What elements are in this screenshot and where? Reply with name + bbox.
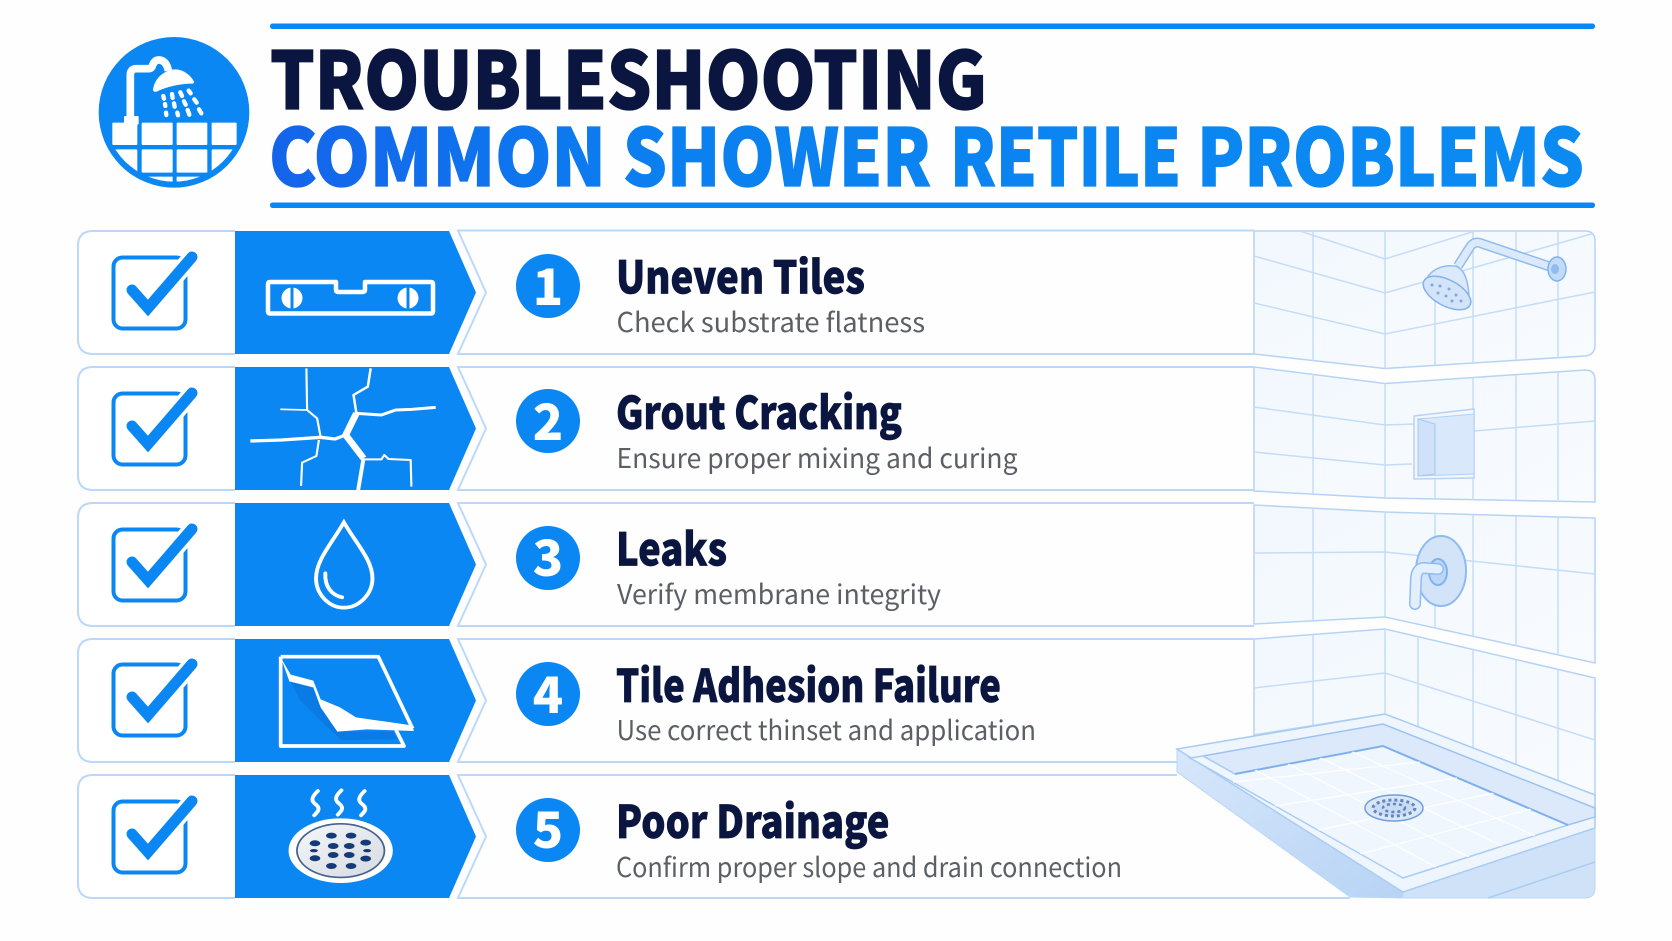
arrow panel: [235, 775, 476, 898]
status checkbox: [114, 800, 193, 872]
icon: shower over tiles: [99, 37, 249, 190]
wall band 3 with valve: [1254, 500, 1595, 665]
title line 2: SHOWER: [623, 94, 931, 209]
icon: shower valve: [1415, 536, 1466, 606]
title line 2: COMMON: [269, 94, 606, 209]
number badge: [516, 519, 580, 591]
icon: water drop: [316, 522, 372, 608]
content outline: [458, 503, 1254, 626]
number badge: [516, 248, 580, 320]
icon: floor drain: [1365, 795, 1423, 821]
number badge: 1: [533, 248, 563, 320]
title line 2: RETILE: [950, 94, 1181, 209]
row 2: [78, 367, 1254, 490]
icon: peeling tile: [281, 657, 414, 746]
title line 2: [269, 94, 1584, 209]
pan right face: [1403, 828, 1595, 898]
left tab outline: [78, 639, 235, 762]
heading: Leaks: [616, 514, 727, 578]
number badge: 3: [533, 519, 563, 591]
pan rim: [1177, 714, 1595, 892]
arrow panel: [235, 503, 476, 626]
heading: Grout Cracking: [616, 377, 902, 442]
content outline: [458, 367, 1254, 490]
wall band 1 with shower head: [1254, 231, 1595, 370]
pan floor: [1190, 746, 1568, 878]
description: Ensure proper mixing and curing: [616, 437, 1018, 476]
content outline: [458, 639, 1254, 762]
row 1: [78, 230, 1254, 354]
row 3: [78, 503, 1254, 626]
row 5: [78, 775, 1350, 898]
pan left face: [1177, 749, 1403, 898]
wall band 2 with niche: [1254, 360, 1595, 502]
niche: [1414, 409, 1474, 479]
left tab outline: [78, 367, 235, 490]
heading: Tile Adhesion Failure: [616, 650, 1001, 715]
description: Confirm proper slope and drain connection: [616, 846, 1122, 885]
title line 1: TROUBLESHOOTING: [270, 17, 987, 132]
icon: spirit level: [268, 282, 433, 314]
heading: Uneven Tiles: [616, 242, 865, 306]
heading: Poor Drainage: [616, 786, 890, 851]
arrow panel: [235, 639, 476, 762]
status checkbox: [114, 663, 193, 736]
content outline: [458, 230, 1254, 354]
bottom rule: [270, 202, 1595, 208]
row 4: [78, 639, 1254, 762]
number badge: 5: [533, 791, 563, 863]
shower pan: [1177, 714, 1595, 898]
title line 2: PROBLEMS: [1197, 94, 1584, 209]
description: Verify membrane integrity: [617, 573, 941, 612]
left tab outline: [78, 503, 235, 626]
description: Check substrate flatness: [616, 301, 925, 340]
content outline: [458, 775, 1350, 898]
icon: shower head: [1418, 242, 1566, 317]
arrow panel: [235, 367, 476, 490]
header: [99, 17, 1595, 209]
left tab outline: [78, 775, 235, 898]
wall band 4: [1254, 625, 1595, 795]
background illustration: tiled shower: [1177, 231, 1595, 898]
number badge: [516, 383, 580, 455]
status checkbox: [114, 528, 193, 600]
status checkbox: [114, 256, 193, 328]
number badge: 2: [533, 383, 563, 455]
icon: clogged drain with steam: [289, 790, 393, 883]
number badge: 4: [533, 656, 563, 728]
left tab outline: [78, 231, 235, 354]
top rule: [270, 24, 1595, 29]
pan inner walls: [1203, 724, 1595, 825]
arrow panel: [235, 231, 476, 354]
number badge: [516, 791, 580, 863]
description: Use correct thinset and application: [616, 709, 1036, 748]
number badge: [516, 656, 580, 728]
icon: cracked grout: [250, 368, 436, 490]
status checkbox: [114, 392, 193, 464]
